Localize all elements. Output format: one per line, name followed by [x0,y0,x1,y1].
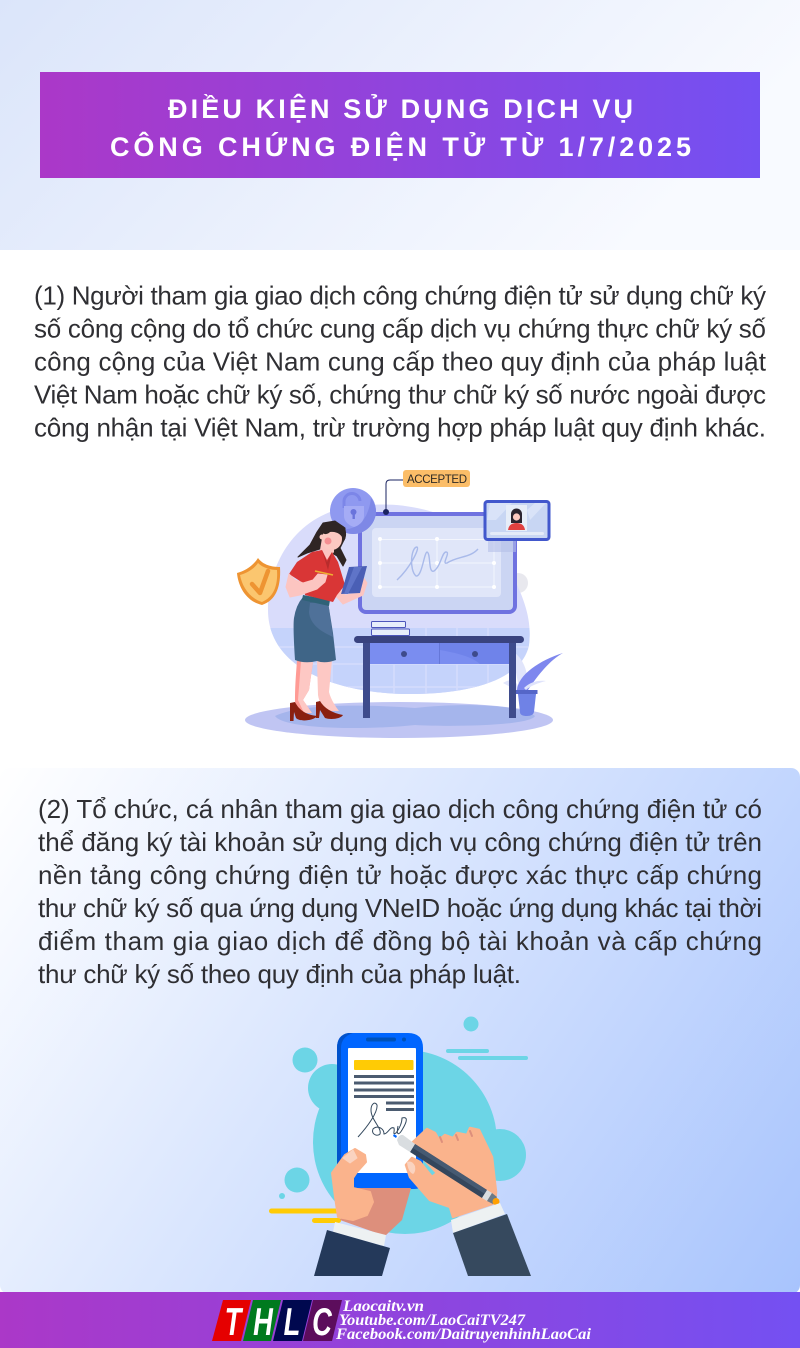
panel: condition 2 [0,768,800,1294]
text block: condition 1: công cộng của Việt Nam cung cấp theo quy định của pháp luật [34,346,767,376]
footer logo: THLC: C [312,1301,332,1344]
accepted tag: ACCEPTED [407,474,467,486]
text block: condition 1: số công cộng do tổ chức cung cấp dịch vụ chứng thực chữ ký số [34,314,766,344]
text block: condition 2: thể đăng ký tài khoản sử dụng dịch vụ công chứng điện tử trên [38,827,762,857]
desk [354,636,524,718]
illustration: hands signing on smartphone [269,1016,531,1276]
footer bar [0,1292,800,1348]
footer links: Laocaitv.vn [342,1298,424,1315]
footer logo: THLC: H [253,1301,273,1344]
text block: condition 1: (1) Người tham gia giao dịch công chứng điện tử sử dụng chữ ký [34,280,766,310]
monitor [360,514,515,612]
video call panel [485,502,549,552]
right hand [393,1128,531,1276]
text block: condition 2: nền tảng công chứng điện tử hoặc được xác thực cấp chứng [38,860,762,890]
illustration: woman signing digitally at desk [237,470,563,738]
text block: condition 2: thư chữ ký số qua ứng dụng VNeID hoặc ứng dụng khác tại thời [38,893,762,923]
footer logo: THLC: L [284,1301,300,1344]
plant [503,653,563,716]
footer links: Youtube.com/LaoCaiTV247 [339,1312,526,1329]
text block: condition 2: thư chữ ký số theo quy định của pháp luật. [38,959,521,989]
footer links [335,1298,592,1343]
text block: condition 2: (2) Tổ chức, cá nhân tham gia giao dịch công chứng điện tử có [38,794,762,824]
text block: condition 2 [38,794,762,989]
footer links: Facebook.com/DaitruyenhinhLaoCai [335,1326,592,1343]
footer logo: THLC [212,1300,342,1344]
text block: condition 1: công nhận tại Việt Nam, trừ trường hợp pháp luật quy định khác. [34,412,766,442]
text block: condition 1 [34,280,767,442]
title banner [40,72,760,178]
shield [237,558,280,605]
title banner: ĐIỀU KIỆN SỬ DỤNG DỊCH VỤ [168,92,633,124]
woman [286,521,367,721]
lock badge [330,488,376,534]
header band [0,0,800,250]
title banner: CÔNG CHỨNG ĐIỆN TỬ TỪ 1/7/2025 [110,130,691,162]
footer logo: THLC: T [225,1301,243,1344]
accepted tag [383,470,470,515]
text block: condition 2: điểm tham gia giao dịch để đồng bộ tài khoản và cấp chứng [38,926,762,956]
text block: condition 1: Việt Nam hoặc chữ ký số, chứng thư chữ ký số nước ngoài được [34,380,766,410]
left hand [314,1149,411,1276]
books [372,622,410,636]
pen [393,1134,500,1205]
phone [337,1033,423,1189]
